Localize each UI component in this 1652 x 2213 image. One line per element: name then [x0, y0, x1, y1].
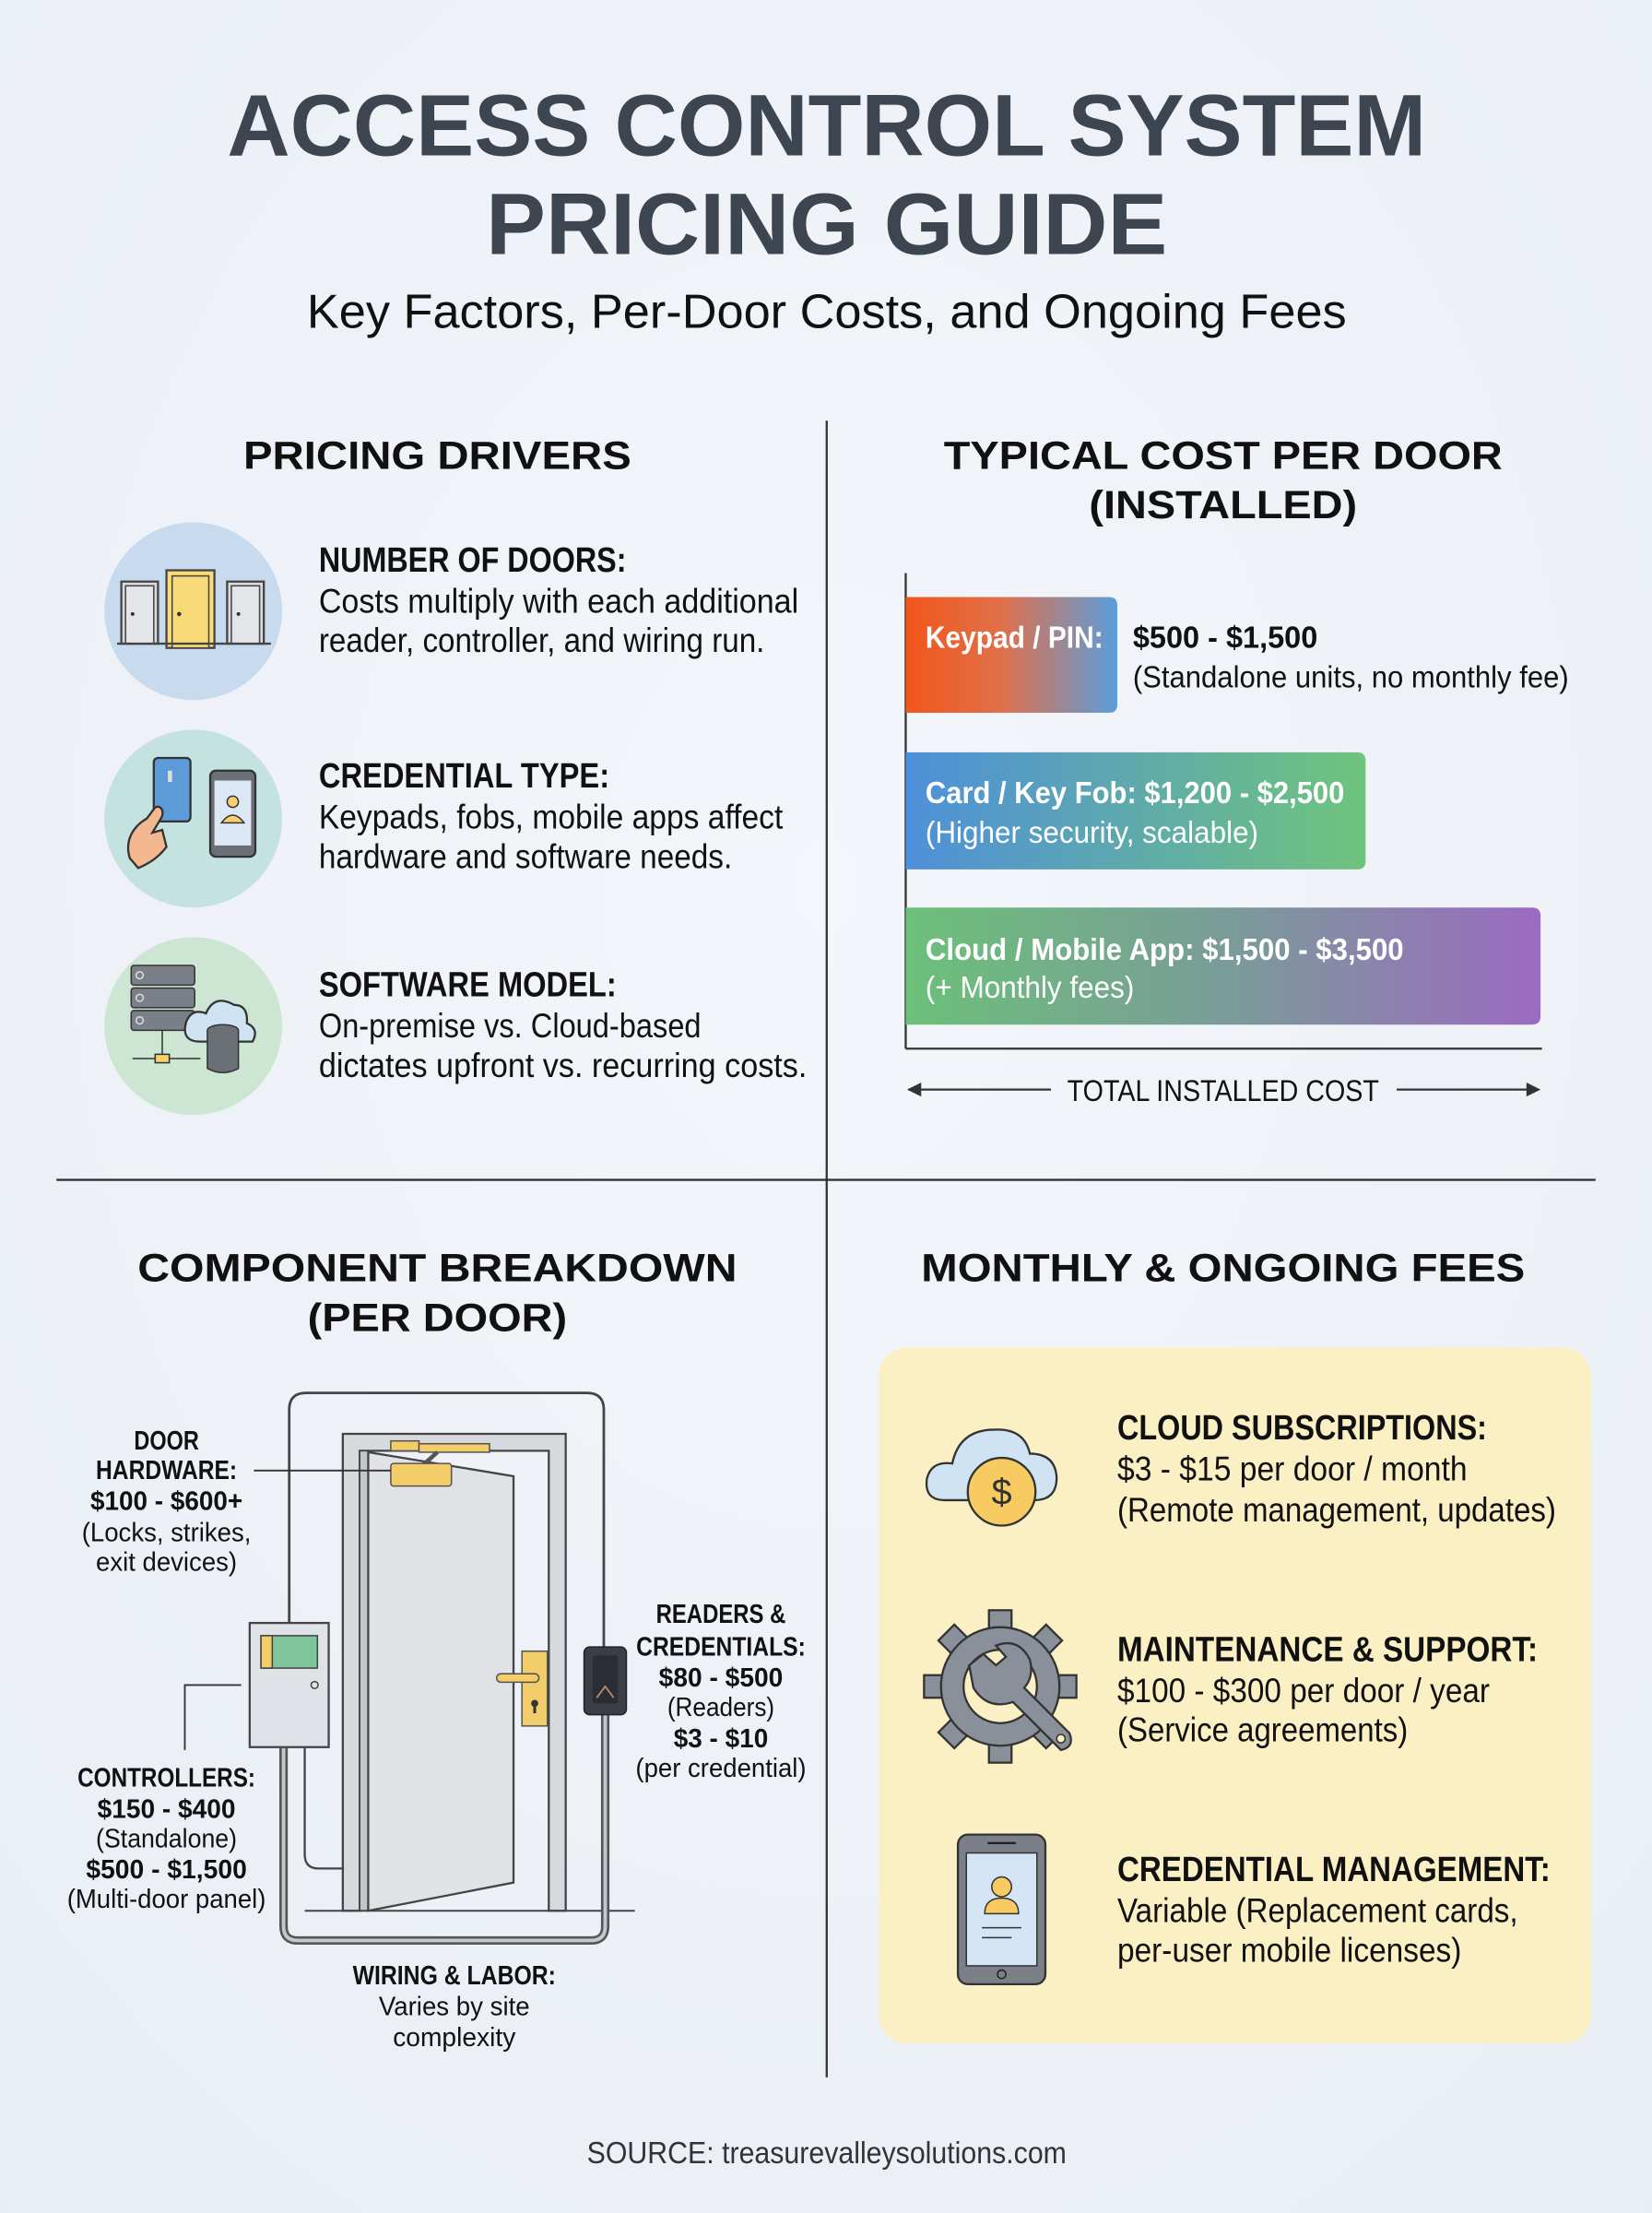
- bar: card: [905, 752, 1365, 870]
- subtitle: Key Factors, Per-Door Costs, and Ongoing Fees: [307, 285, 1347, 338]
- panel: component breakdown: [67, 1247, 807, 2053]
- callout: door hardware: [82, 1426, 391, 1577]
- text: credential management: [1117, 1850, 1551, 1969]
- text: maintenance: [1117, 1629, 1538, 1749]
- text: credential type: Keypads, fobs, mobile apps affect: [319, 799, 783, 836]
- panel: monthly fees: [879, 1247, 1591, 2043]
- callout: door hardware: exit devices): [96, 1547, 237, 1577]
- callout: readers: (per credential): [635, 1754, 807, 1783]
- heading: component breakdown: COMPONENT BREAKDOWN: [137, 1247, 738, 1291]
- bar: card: (Higher security, scalable): [926, 816, 1258, 850]
- heading: component breakdown: [137, 1247, 738, 1340]
- door diagram: [250, 1393, 635, 1940]
- callout: controllers: CONTROLLERS:: [77, 1764, 255, 1793]
- text: software model: On-premise vs. Cloud-based: [319, 1007, 702, 1045]
- text: number of doors: [319, 540, 798, 659]
- heading: typical cost per door: [944, 433, 1503, 527]
- text: software model: [319, 965, 807, 1084]
- heading: typical cost per door: (INSTALLED): [1089, 483, 1357, 527]
- heading: typical cost per door: TYPICAL COST PER DOOR: [944, 433, 1503, 478]
- panel: typical cost per door: [905, 433, 1569, 1107]
- callout: readers: CREDENTIALS:: [636, 1632, 806, 1662]
- callout: readers: $80 - $500: [659, 1663, 783, 1693]
- text: software model: SOFTWARE MODEL:: [319, 965, 617, 1005]
- callout: controllers: $150 - $400: [98, 1794, 236, 1824]
- bar: keypad: [905, 598, 1569, 713]
- text: credential management: CREDENTIAL MANAGEMENT:: [1117, 1850, 1551, 1889]
- source: SOURCE: treasurevalleysolutions.com: [587, 2136, 1067, 2171]
- icon: phone: [958, 1835, 1045, 1984]
- heading: pricing drivers: PRICING DRIVERS: [243, 433, 631, 478]
- icon: software: [104, 937, 282, 1115]
- callout: wiring: Varies by site: [379, 1993, 530, 2022]
- callout: wiring: complexity: [393, 2023, 516, 2053]
- title: PRICING GUIDE: [486, 176, 1167, 274]
- text: cloud subscriptions: $3 - $15 per door / month: [1117, 1450, 1468, 1488]
- callout: controllers: (Standalone): [96, 1824, 237, 1853]
- text: cloud subscriptions: [1117, 1408, 1556, 1529]
- callout: readers: $3 - $10: [674, 1724, 768, 1754]
- bar: card: Card / Key Fob: $1,200 - $2,500: [926, 776, 1344, 811]
- callout: wiring: WIRING & LABOR:: [353, 1961, 556, 1991]
- callout: door hardware: $100 - $600+: [90, 1487, 242, 1517]
- callout: readers: (Readers): [667, 1693, 774, 1722]
- arrow: total installed cost: TOTAL INSTALLED COST: [1068, 1074, 1379, 1107]
- icon: gear wrench: [924, 1610, 1077, 1763]
- callout: controllers: (Multi-door panel): [67, 1885, 266, 1914]
- callout: controllers: [67, 1685, 266, 1914]
- text: number of doors: reader, controller, and wiring run.: [319, 621, 764, 659]
- text: credential type: CREDENTIAL TYPE:: [319, 756, 609, 796]
- bar: cloud: [905, 907, 1540, 1024]
- panel: pricing drivers: [104, 433, 807, 1115]
- text: maintenance: (Service agreements): [1117, 1711, 1408, 1749]
- bar: keypad: Keypad / PIN:: [926, 621, 1103, 656]
- callout: door hardware: DOOR: [134, 1426, 199, 1456]
- text: cloud subscriptions: CLOUD SUBSCRIPTIONS:: [1117, 1408, 1487, 1448]
- text: cloud subscriptions: (Remote management, updates): [1117, 1491, 1556, 1529]
- icon: doors: [104, 522, 282, 700]
- icon: cloud dollar: $: [991, 1473, 1012, 1513]
- callout: wiring: [353, 1961, 556, 2053]
- text: number of doors: Costs multiply with each additional: [319, 582, 798, 620]
- callout: readers: READERS &: [656, 1600, 785, 1629]
- callout: door hardware: HARDWARE:: [96, 1456, 237, 1485]
- icon: cloud dollar: [926, 1429, 1056, 1526]
- bar: keypad: $500 - $1,500: [1133, 621, 1317, 656]
- bar: cloud: Cloud / Mobile App: $1,500 - $3,500: [926, 933, 1404, 967]
- text: credential management: Variable (Replacement cards,: [1117, 1892, 1518, 1930]
- title: ACCESS CONTROL SYSTEM: [227, 77, 1426, 175]
- heading: monthly fees: MONTHLY & ONGOING FEES: [921, 1247, 1525, 1291]
- callout: door hardware: (Locks, strikes,: [82, 1518, 251, 1547]
- text: number of doors: NUMBER OF DOORS:: [319, 540, 626, 580]
- text: software model: dictates upfront vs. recurring costs.: [319, 1047, 807, 1084]
- text: maintenance: $100 - $300 per door / year: [1117, 1672, 1490, 1710]
- title: [227, 77, 1426, 274]
- text: credential type: [319, 756, 783, 875]
- text: maintenance: MAINTENANCE & SUPPORT:: [1117, 1629, 1538, 1669]
- bar: keypad: (Standalone units, no monthly fee): [1133, 660, 1569, 694]
- callout: readers: [635, 1600, 807, 1783]
- arrow: total installed cost: [907, 1074, 1540, 1107]
- text: credential type: hardware and software needs.: [319, 837, 732, 875]
- heading: component breakdown: (PER DOOR): [308, 1296, 567, 1340]
- text: credential management: per-user mobile licenses): [1117, 1931, 1461, 1969]
- icon: credential: [104, 729, 282, 907]
- fees box: [879, 1348, 1591, 2043]
- bar: cloud: (+ Monthly fees): [926, 971, 1134, 1005]
- callout: controllers: $500 - $1,500: [86, 1855, 247, 1885]
- bar chart: [905, 574, 1569, 1048]
